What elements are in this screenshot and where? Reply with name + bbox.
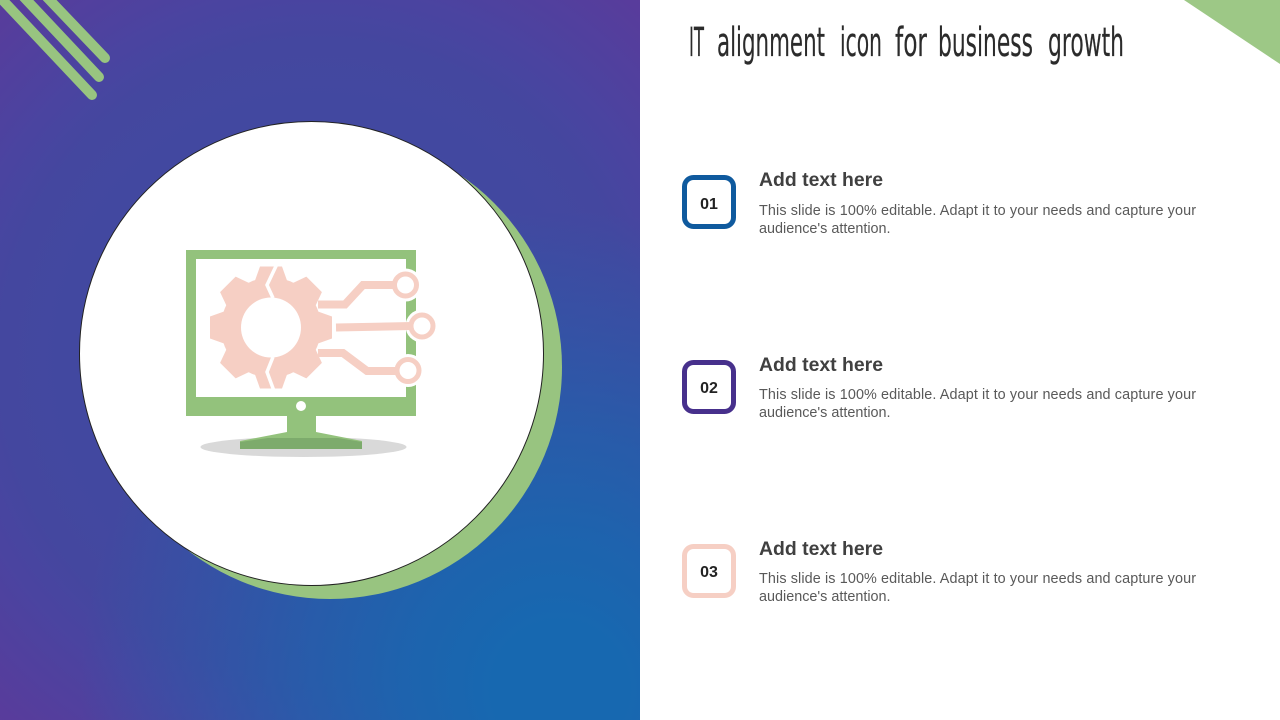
title: for: [895, 20, 927, 66]
green offset circle: [98, 135, 562, 599]
decorative green stripes: [0, 0, 105, 95]
power dot: [296, 401, 306, 411]
title: alignment: [717, 20, 825, 66]
circuit nodes: [394, 274, 433, 382]
body 03: This slide is 100% editable. Adapt it to your needs and capture your: [759, 571, 1196, 587]
heading 03: Add text here: [759, 539, 883, 560]
white circle: [80, 122, 544, 586]
heading 01: Add text here: [759, 170, 883, 191]
item 02: [684, 355, 1196, 421]
badge 01: 01: [700, 196, 718, 213]
gear: [210, 264, 332, 391]
monitor frame: [186, 250, 416, 416]
monitor shadow: [200, 437, 406, 457]
heading 02: Add text here: [759, 355, 883, 376]
badge 03: 03: [700, 564, 718, 581]
circuit traces: [318, 285, 412, 371]
body 02: This slide is 100% editable. Adapt it to your needs and capture your: [759, 387, 1196, 403]
badge 03: [684, 546, 734, 596]
badge 02: 02: [700, 380, 718, 397]
body 02: audience's attention.: [759, 405, 891, 421]
title: [689, 20, 1124, 66]
title: IT: [689, 20, 704, 66]
item 03: [684, 539, 1196, 605]
title: business: [938, 20, 1033, 66]
corner triangle: [1184, 0, 1280, 64]
icon: monitor with gear and circuit: [186, 250, 438, 457]
node halos: [389, 268, 438, 387]
panel: gradient background: [0, 0, 640, 720]
monitor stand: [240, 414, 362, 449]
title: icon: [840, 20, 882, 66]
body 03: audience's attention.: [759, 589, 891, 605]
badge 01: [684, 178, 734, 226]
badge 02: [684, 362, 734, 412]
item 01: [684, 170, 1196, 237]
title: growth: [1048, 20, 1124, 66]
body 01: This slide is 100% editable. Adapt it to your needs and capture your: [759, 203, 1196, 219]
body 01: audience's attention.: [759, 221, 891, 237]
